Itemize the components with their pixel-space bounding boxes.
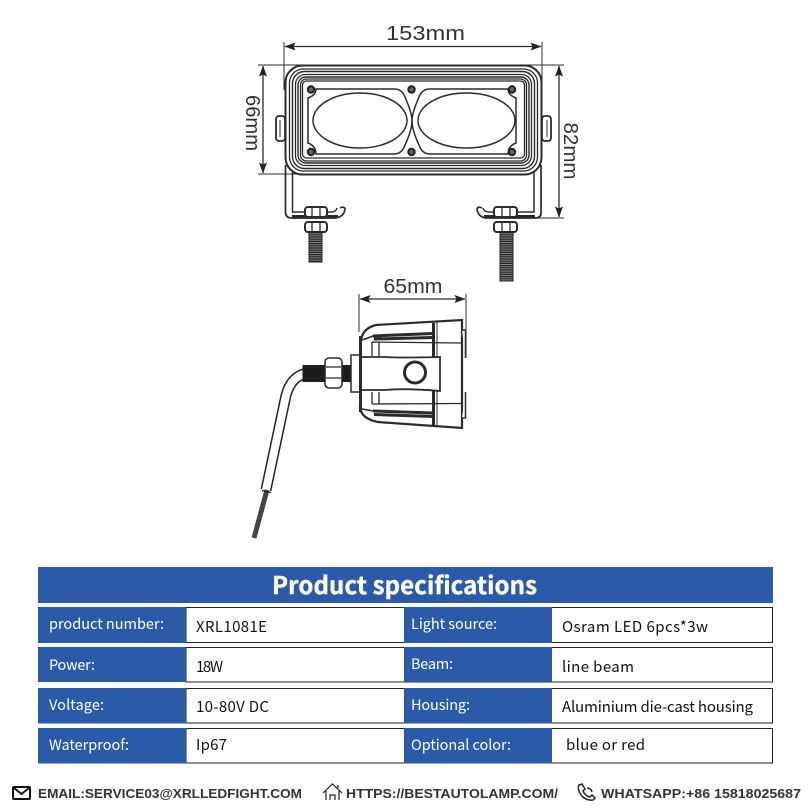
left bracket	[286, 165, 345, 218]
lower fins	[373, 411, 433, 416]
upper fins	[373, 334, 433, 339]
dimension: 153mm width: 153mm	[386, 23, 465, 45]
left lens	[313, 93, 407, 148]
row 1: Osram LED 6pcs*3w	[562, 616, 708, 637]
row 2	[38, 647, 772, 682]
row 4	[38, 728, 772, 764]
dimension: 82mm height	[522, 65, 581, 218]
dimension: 153mm width	[284, 23, 542, 90]
left nut	[305, 207, 327, 232]
row 2: Beam:	[411, 653, 453, 674]
right nut	[494, 207, 517, 232]
row 2: Power:	[49, 654, 95, 675]
screws	[308, 86, 515, 155]
table title: Product specifications	[272, 566, 537, 601]
dimension: 65mm depth	[359, 276, 466, 358]
row 1: product number:	[49, 613, 164, 634]
email text: EMAIL:SERVICE03@XRLLEDFIGHT.COM	[38, 786, 302, 801]
footer contact bar	[13, 784, 801, 801]
mounting brackets and bolts	[286, 165, 541, 281]
row 1: Light source:	[411, 613, 497, 634]
row 3: Voltage:	[49, 694, 104, 715]
side view drawing	[254, 276, 466, 538]
right bolt	[500, 232, 513, 281]
whatsapp text: WHATSAPP:+86 15818025687	[601, 786, 801, 801]
lens panels	[308, 89, 516, 154]
dimension: 82mm height: 82mm	[559, 122, 581, 180]
dimension: 66mm height: 66mm	[241, 95, 263, 151]
icon: phone	[578, 784, 595, 800]
lamp housing	[286, 66, 542, 174]
icon: envelope	[13, 787, 30, 799]
row 1: XRL1081E	[196, 616, 267, 637]
side nubs	[276, 116, 551, 141]
lamp body	[351, 320, 466, 428]
row 2: line beam	[562, 656, 634, 677]
cable	[254, 374, 305, 538]
mounting tab	[351, 355, 360, 392]
row 3: Housing:	[411, 694, 470, 715]
table header bar	[38, 567, 773, 603]
row 3: 10-80V DC	[196, 696, 269, 717]
row 1	[38, 607, 772, 643]
left bolt	[309, 232, 322, 262]
dimension: 66mm height	[241, 65, 306, 174]
right lens	[418, 93, 515, 148]
row 4: Optional color:	[411, 734, 511, 755]
adjustment knob	[404, 362, 426, 383]
website text: HTTPS://BESTAUTOLAMP.COM/	[346, 786, 558, 801]
row 4: Waterproof:	[49, 734, 129, 755]
row 3: Aluminium die-cast housing	[562, 696, 754, 717]
icon: house	[323, 784, 342, 800]
right bracket	[477, 165, 541, 218]
dimension: 65mm depth: 65mm	[384, 276, 442, 298]
cable gland	[303, 358, 350, 388]
row 4: Ip67	[196, 734, 227, 755]
row 2: 18W	[196, 656, 223, 677]
row 4: blue or red	[566, 734, 645, 755]
row 3	[38, 688, 772, 724]
specifications table	[38, 566, 773, 764]
front view drawing	[241, 23, 581, 281]
